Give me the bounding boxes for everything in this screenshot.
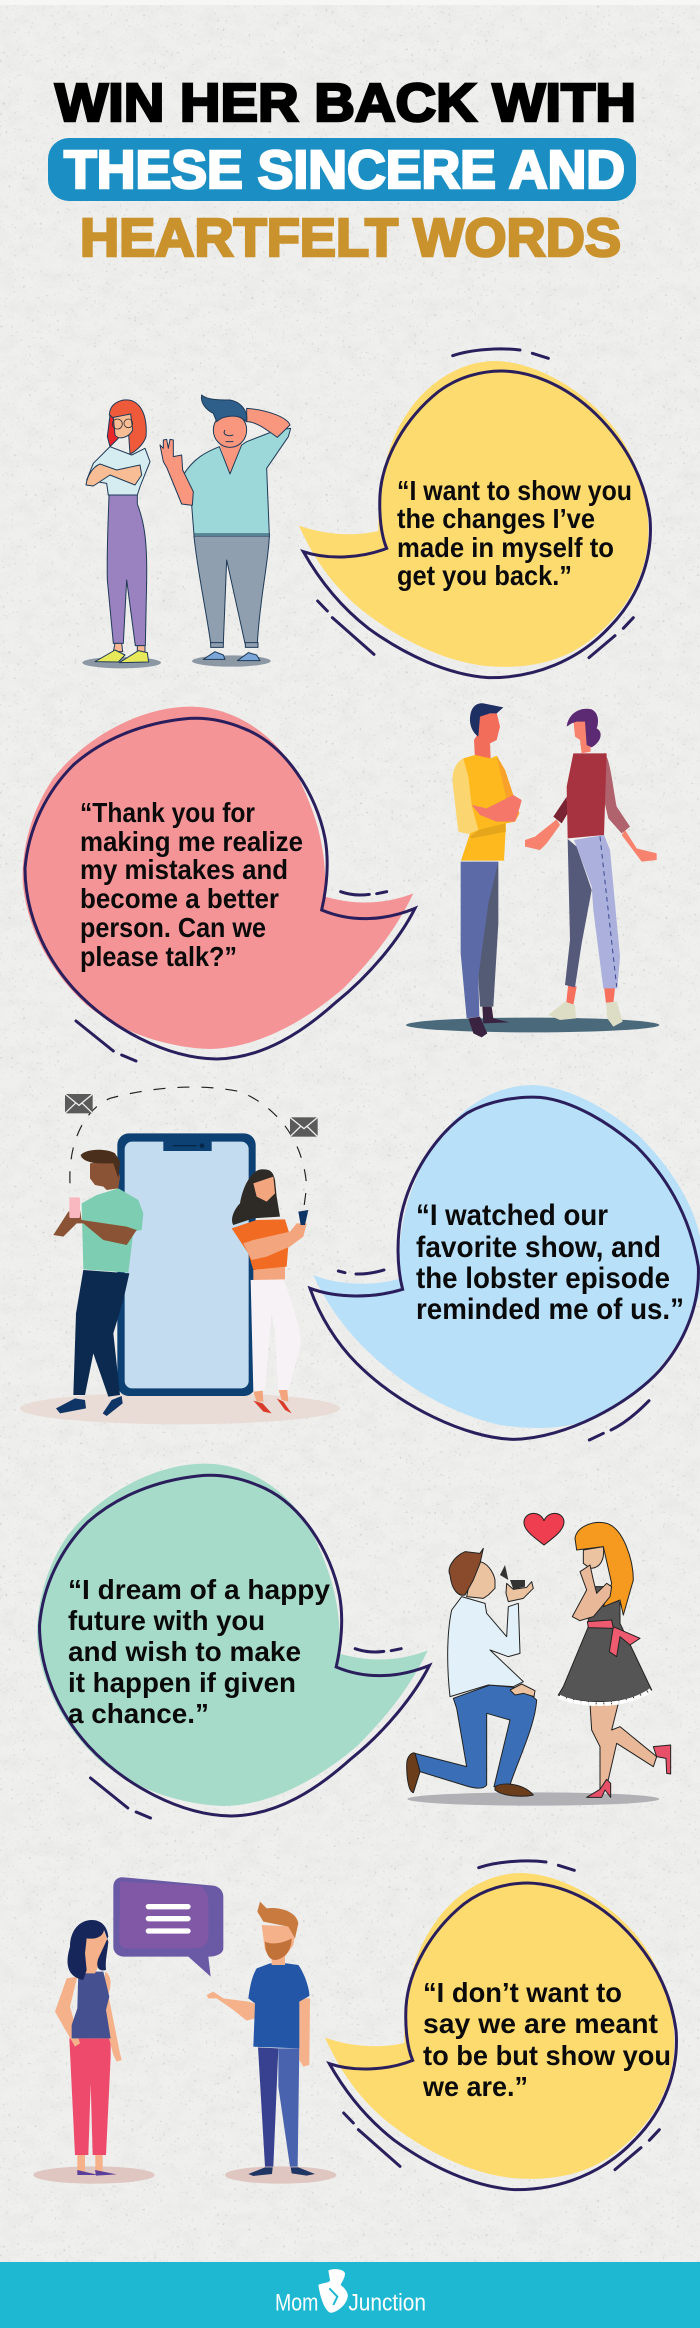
quote 5: “I don’t want to <box>423 1977 622 2008</box>
illustration: couple texting beside phone <box>20 1087 340 1424</box>
illustration: proposal <box>407 1513 671 1806</box>
illustration: arguing couple <box>82 395 291 668</box>
dashed message path <box>70 1087 307 1207</box>
icon: envelope right <box>290 1117 318 1137</box>
illustration: talking couple <box>406 703 659 1037</box>
speech bubble: pink <box>23 707 415 1061</box>
quote 3: reminded me of us.” <box>416 1293 684 1326</box>
quote 4: a chance.” <box>68 1698 209 1729</box>
title line 1: WIN HER BACK WITH <box>55 73 636 133</box>
quote 2: my mistakes and <box>80 854 288 885</box>
quote 1: the changes I’ve <box>397 503 595 534</box>
icon: heart <box>524 1513 564 1545</box>
speech bubble: blue <box>310 1085 700 1440</box>
logo: Junction <box>348 2290 426 2317</box>
quote 1: made in myself to <box>397 532 614 563</box>
quote 4: “I dream of a happy <box>68 1574 330 1605</box>
footer bar <box>0 2262 700 2328</box>
logo <box>275 2269 426 2317</box>
quote 1: get you back.” <box>397 560 572 591</box>
quote 2: making me realize <box>80 826 303 857</box>
quote 3: favorite show, and <box>416 1231 661 1264</box>
quote 2: “Thank you for <box>80 797 255 828</box>
illustration: couple chatting <box>33 1877 336 2184</box>
speech bubble: yellow 1 <box>299 349 650 678</box>
quote 3: “I watched our <box>416 1199 608 1232</box>
quote 5: say we are meant <box>423 2008 658 2039</box>
quote 5: we are.” <box>422 2071 528 2102</box>
icon: chat bubble <box>113 1877 223 1977</box>
quote 4: and wish to make <box>68 1636 301 1667</box>
title pill highlight: THESE SINCERE AND <box>64 140 625 200</box>
quote 2: please talk?” <box>80 941 237 972</box>
quote 1: “I want to show you <box>397 475 632 506</box>
quote 5: to be but show you <box>423 2040 671 2071</box>
quote 3: the lobster episode <box>416 1262 670 1295</box>
icon: envelope left <box>65 1094 93 1113</box>
speech bubble: green <box>37 1464 429 1818</box>
quote 4: future with you <box>68 1605 265 1636</box>
quote 2: person. Can we <box>80 912 266 943</box>
quote 2: become a better <box>80 883 279 914</box>
logo: Mom <box>275 2290 318 2317</box>
phone <box>117 1133 256 1396</box>
quote 4: it happen if given <box>68 1667 296 1698</box>
title line 3: HEARTFELT WORDS <box>80 208 621 268</box>
title <box>48 73 636 268</box>
speech bubble: yellow 2 <box>325 1861 679 2190</box>
